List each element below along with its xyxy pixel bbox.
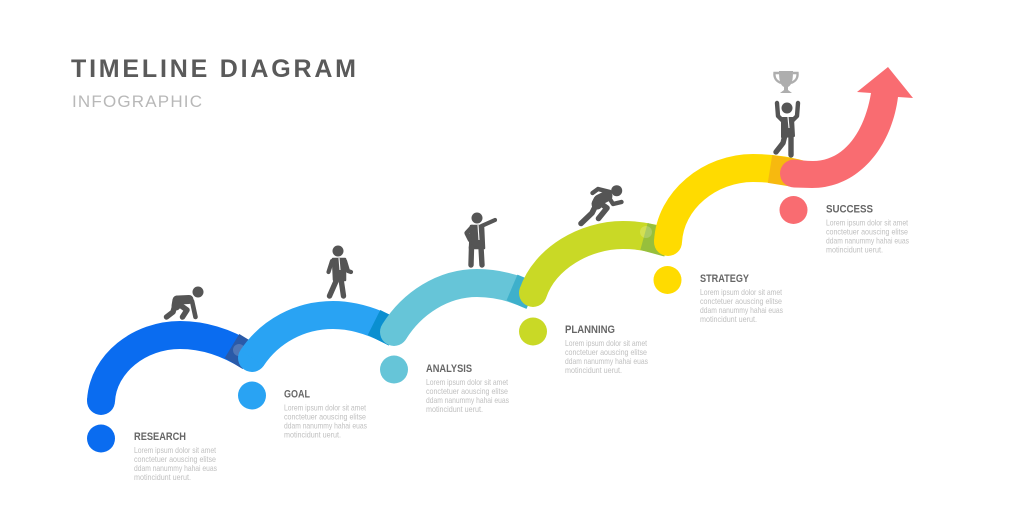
text block: planning: motincidunt uerut. (565, 365, 622, 375)
text block: goal: motincidunt uerut. (284, 430, 341, 440)
text block: analysis: conctetuer aouscing elitse (426, 386, 508, 396)
text block: analysis (426, 363, 509, 414)
text block: planning (565, 324, 648, 375)
marker: goal (238, 382, 266, 410)
text block: strategy: STRATEGY (700, 273, 750, 285)
text block: goal (284, 388, 367, 440)
text block: research: conctetuer aouscing elitse (134, 454, 216, 464)
text block: planning: conctetuer aouscing elitse (565, 347, 647, 357)
text block: research: RESEARCH (134, 431, 186, 443)
text block: research: Lorem ipsum dolor sit amet (134, 445, 217, 455)
text block: success: ddam nanummy hahai euas (826, 236, 909, 246)
text block: goal: Lorem ipsum dolor sit amet (284, 402, 367, 412)
text block: success: Lorem ipsum dolor sit amet (826, 218, 909, 228)
text block: analysis: ANALYSIS (426, 363, 472, 375)
arc: research (87, 335, 250, 415)
text block: planning: PLANNING (565, 324, 615, 336)
arc: planning (519, 226, 668, 307)
text block: analysis: ddam nanummy hahai euas (426, 395, 509, 405)
text block: goal: conctetuer aouscing elitse (284, 412, 366, 422)
text block: success (826, 204, 909, 254)
marker: planning (519, 318, 547, 346)
text block: success: motincidunt uerut. (826, 244, 883, 254)
icon: walking person (328, 246, 351, 296)
text block: planning: ddam nanummy hahai euas (565, 356, 648, 366)
text block: success: SUCCESS (826, 204, 873, 216)
icon: trophy (774, 71, 798, 93)
marker: research (87, 424, 115, 452)
text block: strategy: ddam nanummy hahai euas (700, 305, 783, 315)
marker: analysis (380, 356, 408, 384)
text block: research: ddam nanummy hahai euas (134, 463, 217, 473)
marker: strategy (654, 266, 682, 294)
icon: running person (581, 185, 622, 224)
text block: analysis: motincidunt uerut. (426, 404, 483, 414)
text block: strategy: Lorem ipsum dolor sit amet (700, 287, 783, 297)
title: TIMELINE DIAGRAM (71, 55, 356, 83)
text block: research (134, 431, 217, 482)
text block: strategy: motincidunt uerut. (700, 314, 757, 324)
text block: strategy: conctetuer aouscing elitse (700, 296, 782, 306)
text block: research: motincidunt uerut. (134, 472, 191, 482)
icon: person holding trophy (776, 102, 798, 155)
arc: strategy (654, 168, 800, 256)
arc: goal (238, 315, 395, 372)
text block: success: conctetuer aouscing elitse (826, 226, 908, 236)
text block: goal: GOAL (284, 388, 310, 400)
marker: success (780, 196, 808, 224)
arrow: success (780, 67, 913, 188)
text block: analysis: Lorem ipsum dolor sit amet (426, 377, 509, 387)
icon: crawling person (166, 286, 204, 317)
arc: analysis (380, 283, 532, 346)
icon: pointing person (466, 212, 495, 265)
subtitle: INFOGRAPHIC (72, 92, 202, 111)
text block: strategy (700, 273, 783, 324)
text block: planning: Lorem ipsum dolor sit amet (565, 338, 648, 348)
text block: goal: ddam nanummy hahai euas (284, 420, 367, 430)
